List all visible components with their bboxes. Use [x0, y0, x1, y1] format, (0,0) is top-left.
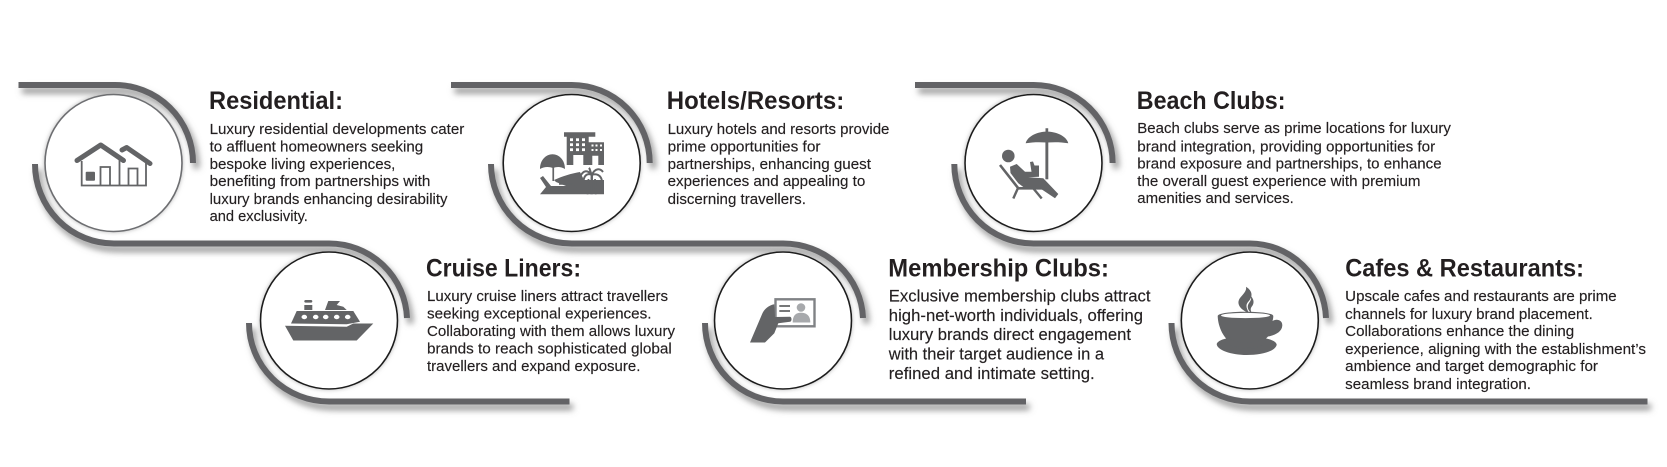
- text: residential description: luxury brands enhancing desirability: [210, 192, 448, 208]
- text: hotels and resorts description: partnerships, enhancing guest: [668, 157, 871, 173]
- text: membership clubs description: luxury brands direct engagement: [889, 326, 1132, 344]
- panel: cruise liners: [260, 252, 676, 389]
- text: residential description: [210, 122, 464, 225]
- circle: beach clubs: [965, 94, 1102, 232]
- text: beach clubs description: brand integration, providing opportunities for: [1137, 139, 1435, 155]
- text: residential description: Luxury residential developments cater: [210, 122, 464, 138]
- text: membership clubs description: Exclusive membership clubs attract: [889, 288, 1151, 306]
- icon: cruise ship: [285, 300, 373, 340]
- heading: Cafes & Restaurants: Cafes & Restaurants:: [1345, 255, 1584, 283]
- icon: hotel and beach: [540, 132, 604, 194]
- text: hotels and resorts description: experiences and appealing to: [668, 174, 865, 190]
- text: beach clubs description: the overall guest experience with premium: [1137, 174, 1420, 190]
- panel: beach clubs: [965, 87, 1452, 232]
- panel: hotels and resorts: [503, 87, 889, 232]
- heading: Hotels/Resorts: Hotels/Resorts:: [667, 87, 844, 115]
- icon: houses: [77, 145, 150, 186]
- text: cruise liners description: brands to reach sophisticated global: [427, 341, 672, 357]
- text: cruise liners description: travellers and expand exposure.: [427, 359, 640, 375]
- text: membership clubs description: [888, 288, 1151, 383]
- connector swooshes: column 1: [18, 85, 570, 402]
- text: membership clubs description: high-net-worth individuals, offering: [889, 307, 1143, 325]
- text: cafes and restaurants description: Upscale cafes and restaurants are prime: [1345, 289, 1617, 305]
- text: cafes and restaurants description: Collaborations enhance the dining: [1345, 324, 1574, 340]
- text: cafes and restaurants description: ambience and target demographic for: [1345, 359, 1598, 375]
- text: cafes and restaurants description: seamless brand integration.: [1345, 377, 1531, 393]
- text: cruise liners description: [427, 289, 676, 375]
- circle: membership clubs: [714, 252, 852, 389]
- circle: residential: [45, 94, 182, 232]
- panel: membership clubs: [714, 252, 1151, 389]
- icon: coffee cup: [1217, 287, 1282, 355]
- heading: Beach Clubs: Beach Clubs:: [1137, 87, 1286, 115]
- circle: cafes and restaurants: [1181, 252, 1318, 389]
- text: membership clubs description: refined and intimate setting.: [889, 365, 1095, 383]
- text: hotels and resorts description: prime opportunities for: [668, 139, 821, 155]
- text: beach clubs description: [1137, 121, 1452, 207]
- text: hotels and resorts description: Luxury hotels and resorts provide: [668, 122, 889, 138]
- panel: residential: [45, 87, 464, 232]
- text: residential description: benefiting from partnerships with: [210, 174, 430, 190]
- circle: hotels and resorts: [503, 94, 640, 232]
- circle: cruise liners: [260, 252, 398, 389]
- connector swooshes: column 2: [451, 85, 1026, 402]
- text: residential description: to affluent homeowners seeking: [210, 139, 423, 155]
- text: beach clubs description: amenities and services.: [1137, 191, 1294, 207]
- text: residential description: bespoke living experiences,: [210, 157, 395, 173]
- icon: person under umbrella: [1000, 128, 1068, 198]
- text: residential description: and exclusivity.: [210, 209, 308, 225]
- icon: hand holding card: [750, 299, 814, 342]
- heading: Cruise Liners: Cruise Liners:: [426, 255, 581, 283]
- text: cafes and restaurants description: channels for luxury brand placement.: [1345, 307, 1593, 323]
- text: hotels and resorts description: [668, 122, 889, 208]
- connector swooshes: column 3: [915, 85, 1648, 402]
- panel: cafes and restaurants: [1181, 252, 1646, 393]
- text: cafes and restaurants description: [1345, 289, 1646, 393]
- text: cruise liners description: seeking exceptional experiences.: [427, 306, 652, 322]
- text: cafes and restaurants description: experience, aligning with the establishment’s: [1345, 342, 1646, 358]
- text: beach clubs description: brand exposure and partnerships, to enhance: [1137, 156, 1442, 172]
- text: beach clubs description: Beach clubs serve as prime locations for luxury: [1137, 121, 1452, 137]
- heading: Residential: Residential:: [209, 87, 343, 115]
- text: cruise liners description: Luxury cruise liners attract travellers: [427, 289, 668, 305]
- text: membership clubs description: with their target audience in a: [888, 346, 1104, 364]
- text: hotels and resorts description: discerning travellers.: [668, 192, 806, 208]
- text: cruise liners description: Collaborating with them allows luxury: [427, 324, 676, 340]
- heading: Membership Clubs: Membership Clubs:: [888, 255, 1109, 283]
